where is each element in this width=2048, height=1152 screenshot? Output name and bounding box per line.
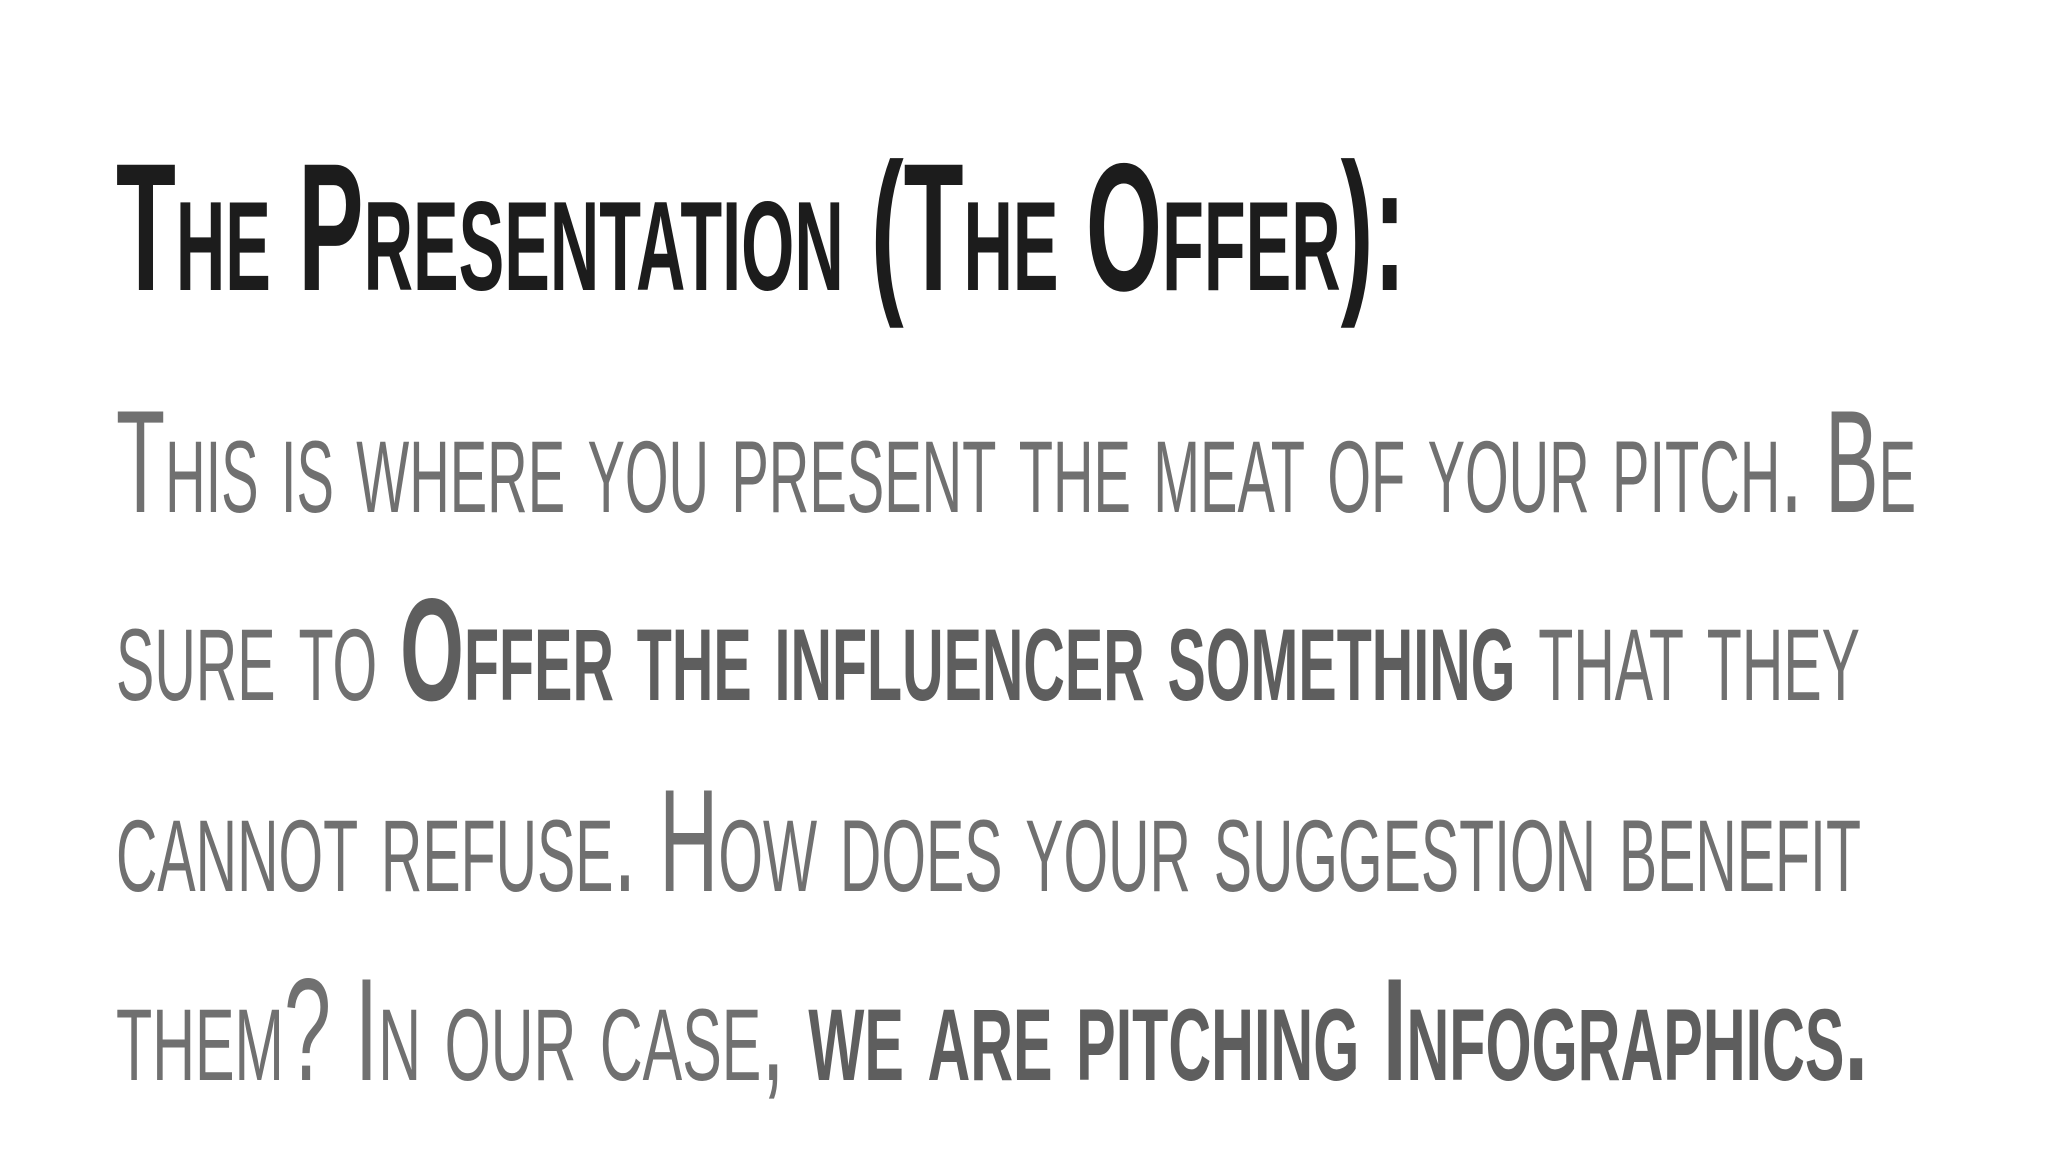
body text bbox=[116, 380, 1916, 1111]
